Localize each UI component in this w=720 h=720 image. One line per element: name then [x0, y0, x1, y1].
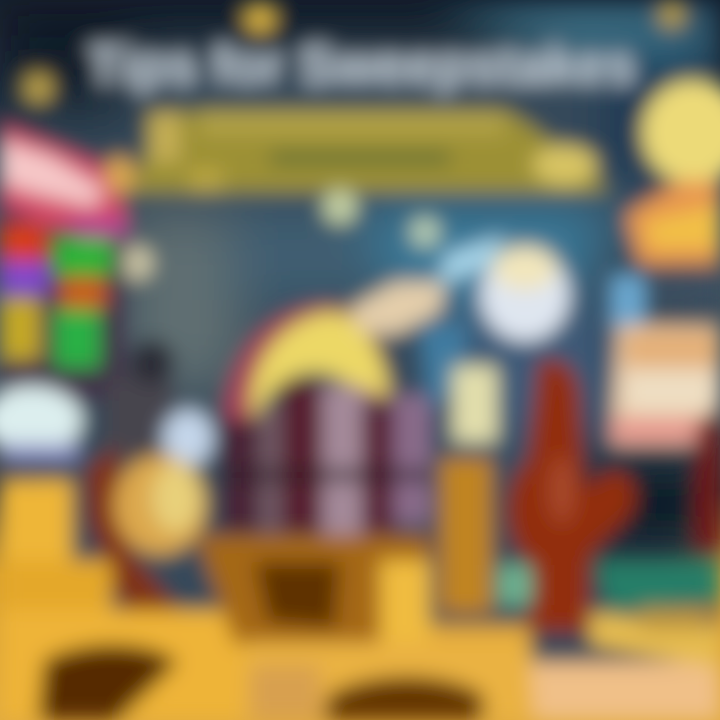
arm reaching toward the white orb	[350, 235, 569, 410]
building facade	[610, 325, 720, 445]
poker chip stacks chart	[222, 382, 430, 536]
pale gold column with glowing top	[440, 366, 497, 613]
red-brown lucky cactus	[507, 358, 636, 632]
dark figure and pale orb	[105, 340, 213, 480]
pale yellow moon	[642, 80, 720, 184]
centre gold block	[195, 535, 540, 720]
dark red doorway	[696, 405, 720, 550]
slot machine pink marquee	[0, 124, 135, 238]
gold subtitle banner	[130, 110, 612, 192]
gold coin piles foreground	[0, 480, 720, 720]
slot machine body	[0, 210, 125, 400]
slot machine coloured reels	[0, 224, 112, 368]
left gold stacks	[0, 480, 248, 720]
peach floor and gold plate	[530, 608, 720, 720]
gold floor base	[0, 625, 530, 720]
title: Tips for Sweepstakes: Tips for Sweepstakes	[88, 33, 636, 96]
arcade building, right	[610, 180, 720, 550]
orange awning	[612, 180, 720, 328]
large gold coin, left	[85, 445, 206, 610]
crescent lucky arc behind the chip stacks	[224, 305, 392, 450]
decorative gold stars	[23, 0, 687, 280]
green floor strip	[498, 562, 720, 612]
dark cavities between the coins	[38, 644, 484, 720]
slot machine, left	[0, 124, 135, 460]
slot machine white tray	[0, 386, 82, 454]
